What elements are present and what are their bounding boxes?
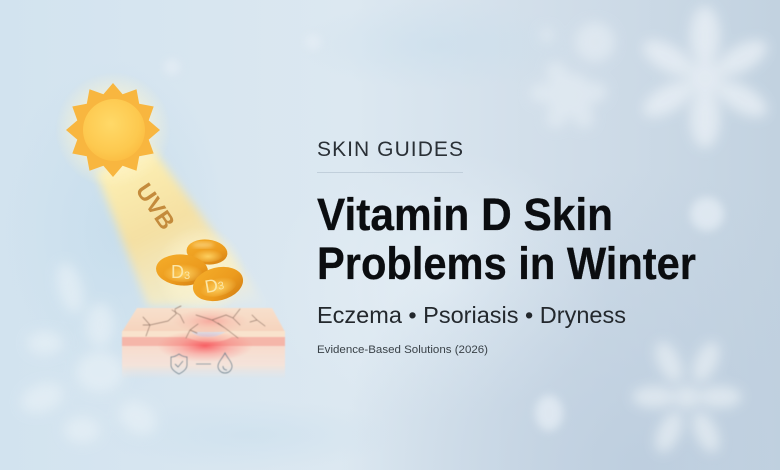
vitamin D3 capsules [154, 226, 247, 318]
rule under eyebrow [317, 172, 463, 173]
snowflake: top middle [530, 22, 615, 128]
title: Vitamin D Skin [317, 189, 613, 240]
sun [55, 72, 171, 188]
skin: top surface [122, 308, 285, 332]
snowflake: top right [637, 6, 773, 148]
capsule: right D3: 3 [217, 280, 225, 293]
capsule: left D3: D [171, 262, 184, 282]
skin: lower layer [122, 346, 285, 378]
skin cross-section [122, 306, 285, 378]
subtitle: Eczema • Psoriasis • Dryness [317, 302, 626, 328]
snowflake: bottom left [17, 260, 163, 443]
capsule: right D3 [189, 262, 247, 306]
skin: cracks [143, 306, 265, 338]
UVB label: UVB [131, 178, 180, 234]
blurred snow dots [164, 34, 724, 431]
icon: shield with check [171, 354, 187, 374]
footnote: Evidence-Based Solutions (2026) [317, 344, 488, 356]
title: Problems in Winter [317, 238, 696, 289]
skin: pale band [122, 331, 285, 342]
title [317, 189, 696, 289]
text block [317, 138, 696, 356]
light beam [96, 148, 268, 306]
icon: water drop [218, 353, 232, 373]
capsule: left D3: 3 [184, 270, 190, 282]
capsule: back [185, 237, 229, 267]
divider line [196, 363, 211, 365]
skin: pink band [122, 337, 285, 346]
snowflake: bottom right [632, 337, 742, 457]
eyebrow: skin guides: SKIN GUIDES [317, 138, 463, 161]
capsule: left D3 [155, 253, 209, 287]
capsule: right D3: D [203, 275, 219, 297]
skin: red inflammation [157, 330, 253, 362]
